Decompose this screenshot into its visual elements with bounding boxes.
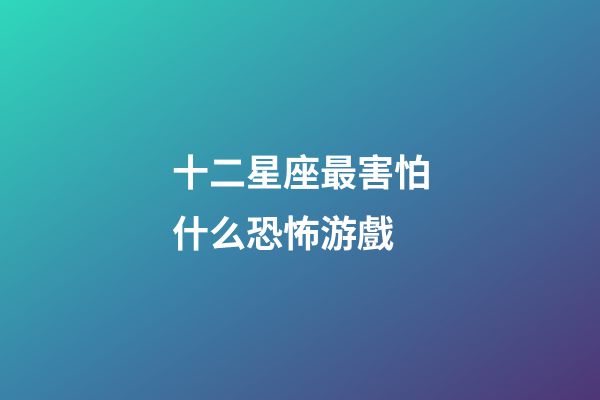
title line 2: 什么恐怖游戲 — [172, 214, 394, 255]
title — [172, 153, 431, 255]
title line 1: 十二星座最害怕 — [172, 153, 431, 194]
